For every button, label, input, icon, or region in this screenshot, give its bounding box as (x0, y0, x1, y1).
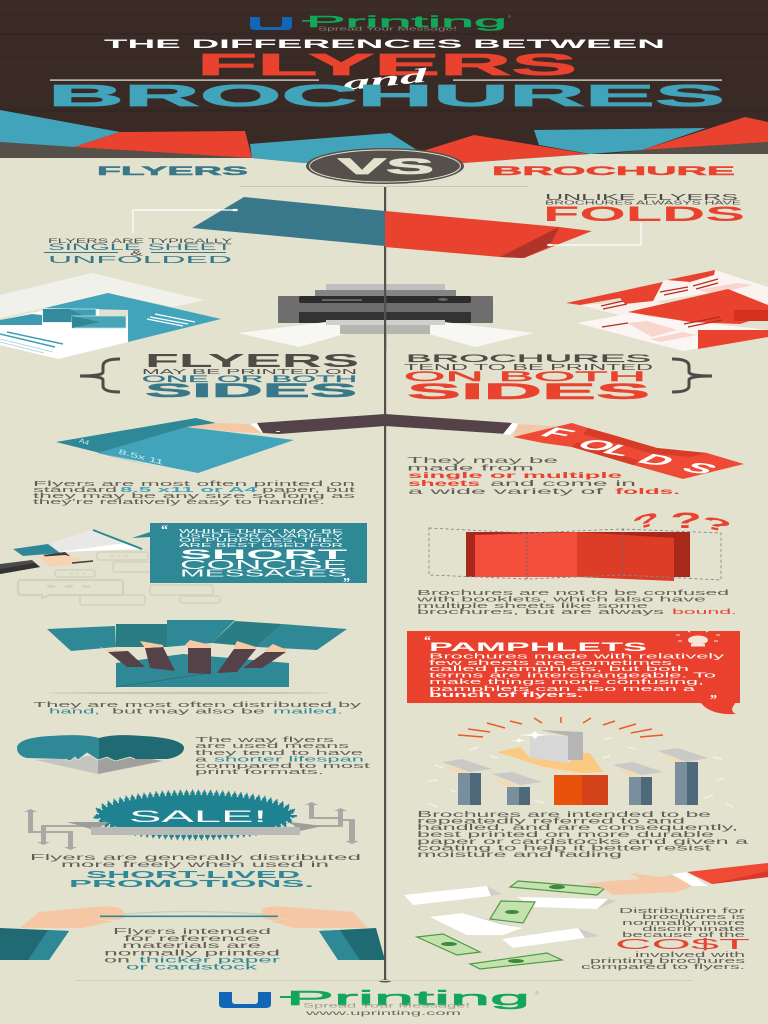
text: thicker paper for reference: for reference (124, 933, 261, 943)
text: shorter lifespan: compared to most (195, 761, 373, 770)
text: flyers printed on one or both sides (142, 351, 359, 402)
text: brochures made from sheets: folds. (615, 486, 680, 496)
text: flyer paper sizes: 8.5 x11 or A4 (120, 485, 259, 494)
text: distribution cost: CO$T (615, 936, 750, 953)
text: brochures are intended to be handled: Brochures are intended to be (417, 810, 713, 819)
text: brochures made from sheets: a wide variety of (408, 486, 605, 496)
illustration: hands raising brochures on bars (428, 730, 733, 807)
text: flyers printed on one or both sides: MAY BE PRINTED ON (142, 369, 357, 376)
text: thicker paper for reference: normally printed (104, 948, 281, 958)
header paper shapes (0, 110, 768, 175)
footer logo: www.uprinting.com (303, 1011, 461, 1017)
text: single sheet and unfolded: & (130, 248, 143, 258)
text: brochures printed on both sides: SIDES (407, 379, 650, 404)
text: brochures vs booklets: with booklets, which also have (414, 594, 706, 604)
text: flyer paper sizes: they're relatively easy to handle. (33, 497, 325, 506)
illustration: hand holding teal flyer: A4 (78, 438, 90, 447)
callout: short concise messages: “ (161, 523, 168, 538)
illustration: hand holding teal flyer: 8.5x 11 (118, 449, 164, 467)
text: brochures are intended to be handled: handled, and are consequently, (417, 823, 738, 832)
text: single sheet and unfolded (44, 238, 234, 266)
speech bubbles (18, 552, 220, 605)
text: single sheet and unfolded: UNFOLDED (48, 254, 233, 266)
column heading: flyers: FLYERS (97, 166, 249, 178)
text: brochures are intended to be handled: best printed on more durable (417, 830, 716, 839)
header logo: Printing (306, 14, 507, 31)
text: distribution by hand: hand, (49, 706, 100, 716)
callout: pamphlets: terms are interchangeable. To (429, 670, 716, 680)
text: distribution cost: Distribution for (619, 908, 747, 915)
illustration: hand dropping money and papers (404, 863, 768, 969)
VS badge: VS (338, 154, 434, 179)
illustration: hand holding teal flyer (56, 414, 385, 473)
illustration: red folded booklet (429, 528, 721, 581)
text: flyer paper sizes: standard (33, 485, 117, 494)
illustration: hand holding red folds banner: S (674, 459, 725, 478)
callout: short concise messages (150, 523, 367, 591)
text: brochures vs booklets: Brochures are not to be confused (417, 588, 729, 597)
callout: pamphlets (407, 631, 740, 714)
illustration: question marks: ? (700, 512, 733, 537)
VS badge (306, 148, 464, 184)
text: short-lived promotions: more freely when used in (61, 859, 330, 869)
text: distribution cost: normally more (622, 920, 745, 927)
illustration: rays around brochure in hand (458, 717, 663, 737)
text: thicker paper for reference: thicker paper (139, 954, 280, 964)
callout: short concise messages: OF PURPOSES, THEY (179, 538, 344, 544)
text: single sheet and unfolded: FLYERS ARE TYPICALLY (48, 238, 234, 245)
center divider line (240, 186, 528, 982)
callout: short concise messages: WHILE THEY MAY BE (179, 529, 344, 535)
callout: pamphlets: “ (424, 634, 431, 649)
footer logo: Spread Your Message! (303, 1004, 471, 1010)
text: flyer paper sizes (33, 479, 358, 506)
callout: pamphlets: few sheets are sometimes (429, 658, 673, 667)
text: short-lived promotions: PROMOTIONS. (69, 878, 314, 890)
text: brochures printed on both sides (404, 353, 654, 404)
illustration: hand holding red folds banner: O (569, 436, 624, 455)
callout: pamphlets: called pamphlets, but both (429, 664, 689, 673)
text: brochures vs booklets (414, 588, 737, 616)
text: thicker paper for reference: or cardstock (126, 962, 259, 972)
text: brochures are intended to be handled (417, 810, 750, 859)
illustration: broken heart (17, 735, 184, 774)
text: brochures vs booklets: bound. (672, 607, 737, 616)
text: thicker paper for reference: materials are (122, 940, 262, 950)
right brace (672, 359, 712, 392)
illustration: sale badge: SALE! (129, 808, 267, 826)
text: brochures are intended to be handled: repeatedly referred to and (417, 816, 685, 826)
callout: pamphlets: bunch of flyers. (429, 690, 583, 699)
text: distribution by hand (33, 700, 362, 716)
text: distribution cost: printing brochures (590, 958, 746, 965)
header logo: Spread Your Message! (318, 26, 457, 32)
callout: pamphlets: Brochures made with relatively (429, 652, 725, 660)
text: flyer paper sizes: paper, but (262, 485, 358, 494)
text: unlike flyers brochures have folds: UNLIKE FLYERS (545, 192, 739, 202)
text: thicker paper for reference: on (104, 954, 131, 964)
text: thicker paper for reference (104, 926, 281, 972)
text: brochures vs booklets: multiple sheets like some (417, 601, 648, 610)
illustration: hand holding red folds banner (385, 414, 744, 479)
text: distribution by hand: They are most often distributed by (33, 700, 362, 709)
icon: light bulb (676, 631, 720, 646)
text: single sheet and unfolded: SINGLE SHEET (48, 242, 232, 253)
text: flyer paper sizes: Flyers are most often printed on (33, 479, 355, 488)
text: shorter lifespan: are used means (195, 741, 350, 750)
callout: short concise messages: USED FOR A VARIETY (179, 534, 344, 540)
text: brochures made from sheets: sheets (408, 478, 481, 488)
illustration: megaphone with hand (0, 530, 150, 574)
text: flyers printed on one or both sides: SIDES (145, 380, 357, 402)
text: brochures made from sheets (407, 455, 680, 496)
text: brochures printed on both sides: BROCHURES (406, 353, 651, 365)
text: distribution by hand: mailed. (273, 706, 343, 716)
footer logo: Printing (286, 988, 530, 1010)
text: brochures printed on both sides: ON BOTH (404, 368, 646, 384)
text: shorter lifespan: they tend to have (195, 748, 363, 757)
text: distribution by hand: but may also be (112, 706, 265, 716)
illustration: flyers stack (0, 273, 221, 359)
illustration: hands from box holding flyers (47, 620, 347, 694)
footer logo: ® (535, 990, 539, 997)
text: distribution cost: because of the (622, 932, 745, 939)
text: unlike flyers brochures have folds: FOLDS (543, 203, 745, 226)
callout: pamphlets: PAMPHLETS (429, 642, 648, 654)
illustration: sale badge (24, 794, 359, 850)
text: distribution cost: discriminate (642, 926, 745, 933)
illustration: question marks: ? (670, 508, 702, 533)
title: and (342, 64, 431, 95)
text: shorter lifespan: print formats. (195, 767, 324, 776)
callout: short concise messages: ARE BEST USED FOR (179, 543, 343, 549)
callout: pamphlets: make things more confusing, (429, 677, 704, 686)
title: THE DIFFERENCES BETWEEN (104, 39, 665, 51)
text: brochures made from sheets: single or multiple (408, 470, 623, 480)
illustration: red brochures (566, 270, 768, 351)
text: shorter lifespan: shorter lifespan (214, 754, 364, 764)
text: distribution cost (581, 908, 750, 971)
callout: pamphlets: pamphlets can also mean a (429, 684, 697, 693)
text: short-lived promotions (30, 852, 362, 890)
header logo: ® (508, 14, 511, 19)
callout: short concise messages: MESSAGES (180, 568, 348, 580)
callout: short concise messages: CONCISE (180, 558, 347, 572)
illustration: question marks: ? (630, 508, 662, 534)
callout: short concise messages: ” (343, 576, 350, 591)
title: BROCHURES (48, 78, 725, 113)
text: flyers printed on one or both sides: ONE OR BOTH (142, 374, 357, 385)
text: thicker paper for reference: Flyers intended (113, 926, 272, 936)
text: distribution cost: compared to flyers. (581, 964, 745, 971)
column heading: brochure: BROCHURE (492, 166, 736, 178)
title (48, 39, 725, 113)
left brace (80, 359, 120, 392)
text: flyers printed on one or both sides: FLYERS (145, 351, 359, 371)
illustration: hands bending thick paper (0, 906, 385, 960)
text: brochures vs booklets: brochures, but are always (417, 607, 665, 616)
text: brochures made from sheets: and come in (490, 478, 637, 488)
text: short-lived promotions: Flyers are generally distributed (30, 852, 362, 862)
ribbon: flyer vs folded brochure (133, 197, 641, 258)
text: short-lived promotions: SHORT-LIVED (86, 869, 301, 881)
text: brochures made from sheets: made from (407, 462, 534, 472)
text: brochures printed on both sides: TEND TO BE PRINTED (404, 363, 654, 372)
text: brochures made from sheets: They may be (407, 455, 559, 465)
wood header background (0, 0, 768, 170)
text: distribution cost: involved with (635, 952, 745, 959)
text: shorter lifespan: a (195, 754, 209, 764)
text: unlike flyers brochures have folds: BROCHURES ALWASYS HAVE (545, 200, 743, 206)
illustration: hand holding red folds banner: F (533, 425, 581, 442)
illustration: question marks (630, 508, 733, 537)
callout: short concise messages: SHORT (180, 546, 349, 562)
text: shorter lifespan (195, 735, 373, 776)
text: flyer paper sizes: they may be any size so long as (33, 491, 356, 500)
illustration: hand holding red folds banner: D (630, 451, 683, 470)
text: brochures are intended to be handled: paper or cardstocks and given a (417, 837, 750, 846)
illustration: hand holding red folds banner: L (595, 442, 643, 459)
text: brochures are intended to be handled: coating to help it better resist (417, 844, 713, 852)
text: brochures are intended to be handled: moisture and fading (417, 850, 622, 859)
title: FLYERS (197, 47, 577, 82)
text: distribution cost: brochures is (642, 914, 746, 921)
header logo (250, 14, 511, 32)
footer logo (76, 980, 692, 1017)
text: unlike flyers brochures have folds (543, 192, 745, 226)
illustration: printer (238, 284, 534, 350)
text: shorter lifespan: The way flyers (195, 735, 335, 744)
callout: pamphlets: ” (710, 693, 717, 708)
